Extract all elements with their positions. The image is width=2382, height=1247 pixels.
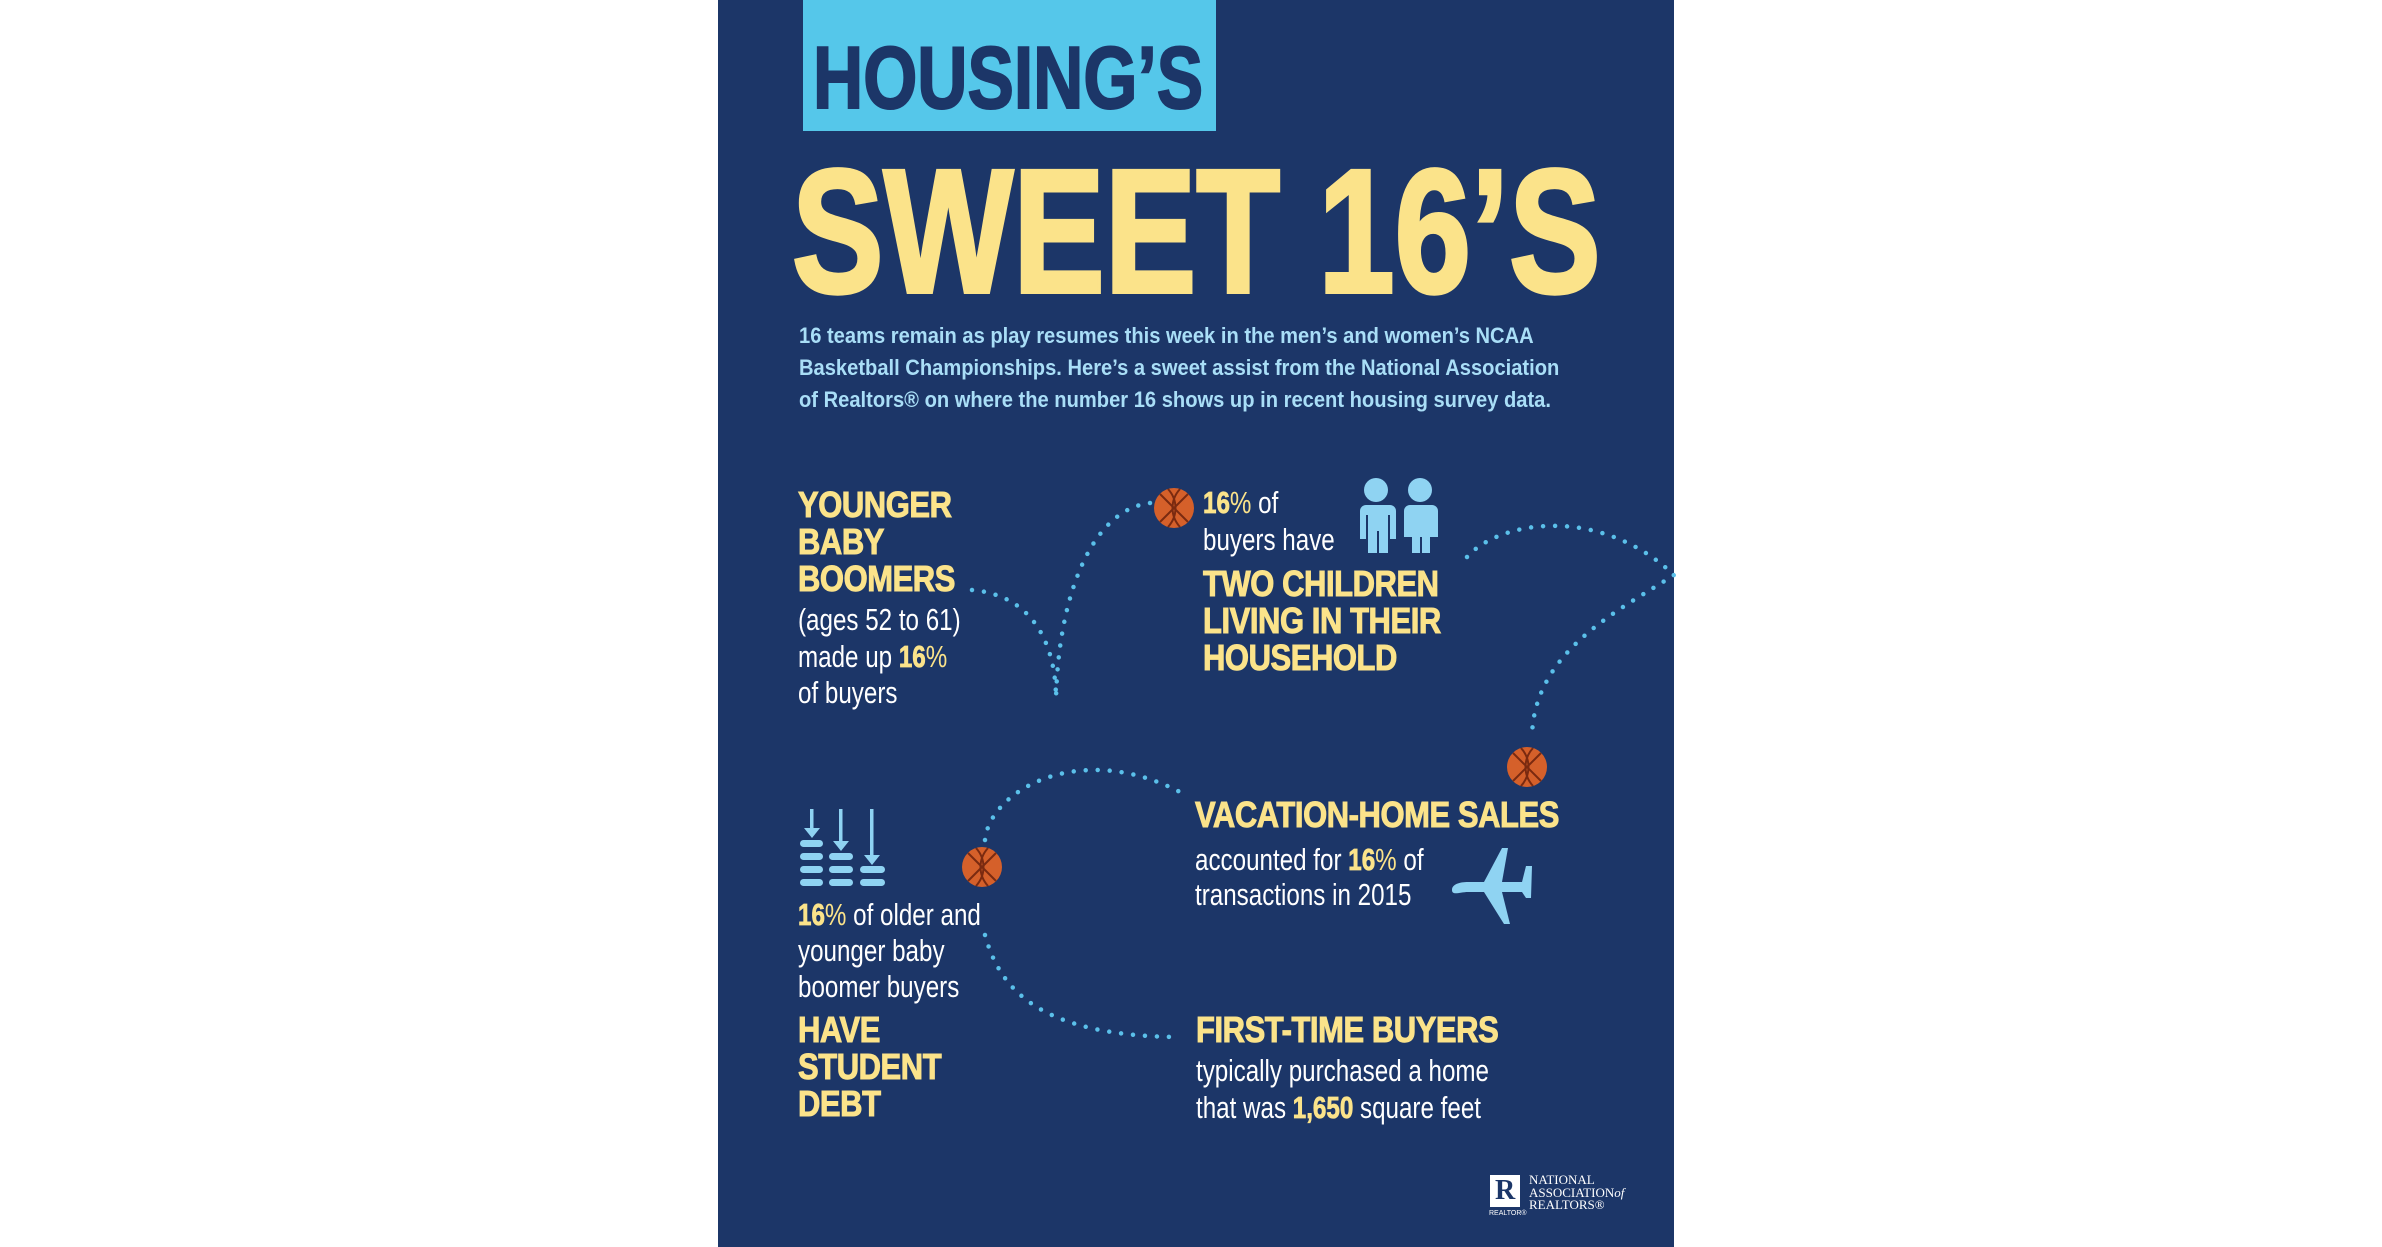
logo: National Association of Realtors: NATIONAL [1529, 1172, 1595, 1187]
intro paragraph: 16 teams remain as play resumes this week in the men’s and women’s NCAA [799, 323, 1534, 348]
icon: basketball 2 [1507, 747, 1547, 787]
icon: student debt coins and arrows [800, 809, 885, 886]
stat block: vacation-home sales: VACATION-HOME SALES [1195, 794, 1559, 835]
icon: two children [1360, 478, 1438, 553]
stat block: student debt: younger baby [798, 933, 945, 968]
stat block: student debt: DEBT [798, 1083, 881, 1124]
logo: National Association of Realtors: REALTORS® [1529, 1197, 1605, 1212]
logo: National Association of Realtors [1489, 1172, 1626, 1217]
stat block: first-time buyers: that was 1,650 square feet [1196, 1090, 1481, 1125]
stat block: first-time buyers: typically purchased a home [1196, 1053, 1489, 1088]
title: SWEET 16'S: SWEET 16’S [792, 134, 1601, 330]
stat block: younger baby boomers: BOOMERS [798, 558, 955, 599]
icon: basketball 1 [1154, 488, 1194, 528]
stat block: younger baby boomers: made up 16% [798, 639, 947, 674]
stat block: vacation-home sales: transactions in 2015 [1195, 877, 1411, 912]
stat block: younger baby boomers [798, 484, 961, 710]
stat block: younger baby boomers: of buyers [798, 675, 897, 710]
stat block: vacation-home sales [1194, 794, 1559, 912]
intro paragraph: of Realtors® on where the number 16 shows up in recent housing survey data. [799, 387, 1551, 412]
logo: National Association of Realtors: REALTOR® [1489, 1210, 1527, 1217]
stat block: two children: HOUSEHOLD [1203, 637, 1397, 678]
stat block: younger baby boomers: (ages 52 to 61) [798, 602, 961, 637]
stat block: student debt [798, 897, 981, 1124]
stat block: first-time buyers: FIRST-TIME BUYERS [1196, 1009, 1498, 1050]
stat block: younger baby boomers: BABY [798, 521, 884, 562]
logo: National Association of Realtors: ASSOCIATIONof [1529, 1184, 1624, 1200]
intro paragraph: Basketball Championships. Here’s a sweet assist from the National Association [799, 355, 1559, 380]
stat block: two children: TWO CHILDREN [1203, 563, 1439, 604]
stat block: student debt: STUDENT [798, 1046, 941, 1087]
intro paragraph [799, 323, 1559, 412]
stat block: vacation-home sales: accounted for 16% of [1195, 842, 1424, 877]
stat block: student debt: 16% of older and [798, 897, 981, 932]
stat block: first-time buyers [1196, 1009, 1498, 1125]
stat block: two children: LIVING IN THEIR [1203, 600, 1441, 641]
navy panel background [718, 0, 1674, 1247]
stat block: student debt: HAVE [798, 1009, 880, 1050]
icon: airplane [1452, 848, 1532, 924]
title: HOUSING'S banner: HOUSING’S [813, 28, 1203, 127]
stat block: two children: buyers have [1203, 522, 1335, 557]
stat block: two children [1202, 485, 1442, 678]
icon: basketball 3 [962, 847, 1002, 887]
stat block: student debt: boomer buyers [798, 969, 959, 1004]
stat block: two children: 16% of [1203, 485, 1278, 520]
stat block: younger baby boomers: YOUNGER [798, 484, 952, 525]
logo: National Association of Realtors: R [1495, 1175, 1515, 1206]
